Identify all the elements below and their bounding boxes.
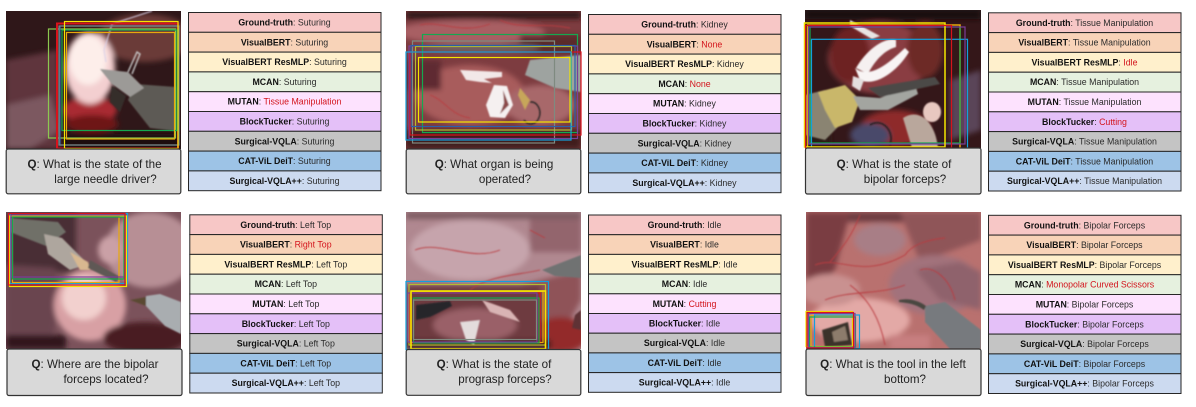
row: MUTAN: MUTAN: Kidney	[653, 99, 717, 109]
row: VisualBERT: VisualBERT: None	[647, 39, 722, 49]
question box 6: Q: What is the tool in the left	[820, 358, 967, 371]
row: MUTAN: MUTAN: Bipolar Forceps	[1036, 300, 1134, 310]
row: Surgical-VQLA++	[588, 173, 781, 193]
answer table 6	[988, 215, 1181, 394]
row: MCAN: MCAN: Left Top	[255, 279, 317, 289]
bounding boxes 4	[8, 214, 128, 286]
question box 6	[806, 349, 981, 396]
row: BlockTucker	[588, 314, 781, 333]
row: CAT-ViL DeiT: CAT-ViL DeiT: Kidney	[641, 158, 728, 168]
row: BlockTucker: BlockTucker: Bipolar Forceps	[1025, 319, 1144, 329]
row: CAT-ViL DeiT	[588, 353, 781, 373]
panel: tool in left bottom	[800, 212, 1181, 396]
surgical image 3 with bounding boxes	[805, 10, 981, 148]
row: CAT-ViL DeiT: CAT-ViL DeiT: Idle	[648, 358, 722, 368]
row: Ground-truth	[188, 12, 381, 32]
row: Surgical-VQLA	[988, 132, 1181, 151]
row: VisualBERT	[988, 33, 1181, 52]
row: Ground-truth: Ground-truth: Tissue Manipulation	[1016, 18, 1153, 28]
row: MCAN: MCAN: None	[658, 79, 711, 89]
answer table 3	[988, 13, 1181, 191]
row: VisualBERT: VisualBERT: Idle	[650, 240, 719, 250]
answer table 4	[190, 215, 382, 393]
question box 1: Q: What is the state of the	[27, 158, 162, 171]
row: CAT-ViL DeiT	[190, 353, 382, 373]
surgical image 4 with bounding boxes	[6, 212, 181, 349]
row: Surgical-VQLA: Surgical-VQLA: Suturing	[235, 136, 334, 146]
row: MCAN	[988, 72, 1181, 92]
row: CAT-ViL DeiT: CAT-ViL DeiT: Left Top	[240, 358, 331, 368]
row: VisualBERT ResMLP: VisualBERT ResMLP: Left Top	[224, 259, 347, 269]
answer table 5	[588, 215, 781, 392]
row: MCAN: MCAN: Idle	[662, 279, 707, 289]
row: Surgical-VQLA: Surgical-VQLA: Kidney	[638, 138, 732, 148]
question box 3: bipolar forceps?	[864, 173, 947, 186]
panel: bipolar forceps location	[6, 212, 382, 396]
answer table 2	[588, 14, 781, 193]
row: Surgical-VQLA++	[188, 171, 381, 191]
question box 2	[406, 149, 581, 194]
row: VisualBERT: VisualBERT: Right Top	[240, 240, 332, 250]
row: Surgical-VQLA	[588, 333, 781, 353]
row: CAT-ViL DeiT	[588, 153, 781, 173]
question box 1: large needle driver?	[54, 173, 157, 186]
row: MUTAN	[588, 294, 781, 314]
question box 1	[6, 149, 181, 194]
row: VisualBERT ResMLP: VisualBERT ResMLP: Idle	[632, 259, 738, 269]
question box 5: Q: What is the state of	[437, 358, 552, 371]
row: VisualBERT ResMLP	[190, 254, 382, 274]
row: Surgical-VQLA++: Surgical-VQLA++: Suturing	[229, 176, 340, 186]
question box 5: prograsp forceps?	[458, 373, 552, 386]
row: Surgical-VQLA	[588, 133, 781, 153]
row: CAT-ViL DeiT	[988, 354, 1181, 374]
row: BlockTucker: BlockTucker: Left Top	[242, 319, 330, 329]
row: CAT-ViL DeiT: CAT-ViL DeiT: Tissue Manipulation	[1016, 156, 1153, 166]
surgical image 5 with bounding boxes	[406, 212, 588, 353]
row: VisualBERT ResMLP	[188, 52, 381, 72]
question box 3: Q: What is the state of	[837, 158, 952, 171]
row: BlockTucker	[988, 112, 1181, 132]
row: VisualBERT ResMLP: VisualBERT ResMLP: Kidney	[625, 59, 744, 69]
row: VisualBERT ResMLP	[588, 54, 781, 74]
row: MCAN	[588, 274, 781, 294]
row: VisualBERT	[188, 32, 381, 52]
row: BlockTucker: BlockTucker: Suturing	[240, 116, 330, 126]
row: CAT-ViL DeiT	[188, 151, 381, 171]
answer table 1	[188, 12, 381, 191]
row: Ground-truth	[588, 14, 781, 34]
row: Surgical-VQLA	[988, 334, 1181, 354]
row: VisualBERT ResMLP	[988, 52, 1181, 72]
row: MUTAN: MUTAN: Left Top	[252, 299, 319, 309]
row: Surgical-VQLA++	[988, 374, 1181, 394]
row: VisualBERT: VisualBERT: Tissue Manipulation	[1018, 38, 1151, 48]
row: VisualBERT	[190, 235, 382, 254]
row: MUTAN: MUTAN: Tissue Manipulation	[1028, 97, 1141, 107]
row: MUTAN	[188, 92, 381, 112]
row: MCAN	[188, 72, 381, 92]
row: Surgical-VQLA++: Surgical-VQLA++: Left Top	[232, 378, 340, 388]
row: MUTAN	[988, 294, 1181, 314]
panel: bipolar forceps state	[804, 10, 1181, 194]
row: MCAN	[988, 275, 1181, 294]
row: Ground-truth: Ground-truth: Bipolar Forceps	[1024, 220, 1146, 230]
surgical image 6 with bounding boxes	[800, 212, 981, 349]
question box 4: forceps located?	[63, 373, 149, 386]
row: Surgical-VQLA	[190, 334, 382, 353]
question box 4	[7, 349, 182, 396]
row: CAT-ViL DeiT	[988, 151, 1181, 171]
question box 5	[406, 350, 581, 395]
row: Surgical-VQLA	[188, 131, 381, 151]
row: Ground-truth: Ground-truth: Idle	[648, 220, 721, 230]
row: Ground-truth	[988, 13, 1181, 33]
row: Ground-truth	[190, 215, 382, 235]
row: MCAN: MCAN: Monopolar Curved Scissors	[1015, 280, 1155, 290]
surgical image 1 with bounding boxes	[6, 11, 193, 149]
row: Ground-truth: Ground-truth: Left Top	[240, 220, 331, 230]
row: Ground-truth	[988, 215, 1181, 235]
row: CAT-ViL DeiT: CAT-ViL DeiT: Bipolar Forceps	[1024, 359, 1146, 369]
row: VisualBERT: VisualBERT: Suturing	[241, 37, 328, 47]
row: VisualBERT ResMLP	[988, 255, 1181, 275]
row: MUTAN: MUTAN: Tissue Manipulation	[228, 97, 341, 107]
row: VisualBERT	[588, 34, 781, 54]
row: BlockTucker: BlockTucker: Idle	[649, 318, 720, 328]
question box 2: Q: What organ is being	[435, 158, 553, 171]
row: Surgical-VQLA++: Surgical-VQLA++: Idle	[639, 378, 730, 388]
row: MCAN	[588, 74, 781, 94]
row: Surgical-VQLA++	[190, 373, 382, 393]
row: BlockTucker	[188, 112, 381, 131]
row: VisualBERT ResMLP: VisualBERT ResMLP: Bipolar Forceps	[1008, 260, 1162, 270]
row: VisualBERT ResMLP: VisualBERT ResMLP: Suturing	[222, 57, 347, 67]
surgical image 2 with bounding boxes	[395, 11, 581, 149]
row: MCAN: MCAN: Suturing	[252, 77, 317, 87]
row: Surgical-VQLA++	[588, 373, 781, 392]
row: Surgical-VQLA++	[988, 171, 1181, 191]
row: VisualBERT	[988, 235, 1181, 255]
question box 4: Q: Where are the bipolar	[32, 358, 159, 371]
question box 3	[806, 148, 981, 194]
row: MUTAN	[190, 294, 382, 314]
row: VisualBERT: VisualBERT: Bipolar Forceps	[1026, 240, 1143, 250]
row: Ground-truth	[588, 215, 781, 235]
bounding boxes 3	[804, 23, 968, 157]
row: BlockTucker	[988, 314, 1181, 334]
bounding boxes 5	[406, 282, 548, 350]
row: BlockTucker: BlockTucker: Cutting	[1042, 117, 1127, 127]
row: Surgical-VQLA++: Surgical-VQLA++: Bipolar Forceps	[1015, 379, 1155, 389]
bounding boxes 6	[806, 312, 860, 348]
row: BlockTucker	[588, 114, 781, 133]
row: MUTAN	[988, 92, 1181, 112]
bounding boxes 1	[48, 22, 179, 148]
row: MUTAN: MUTAN: Cutting	[653, 299, 717, 309]
row: Ground-truth: Ground-truth: Suturing	[238, 18, 331, 28]
row: VisualBERT	[588, 235, 781, 254]
row: VisualBERT ResMLP	[588, 254, 781, 274]
panel: organ being operated	[395, 11, 781, 194]
row: Surgical-VQLA++: Surgical-VQLA++: Tissue Manipulation	[1007, 176, 1162, 186]
row: Surgical-VQLA: Surgical-VQLA: Left Top	[237, 339, 335, 349]
row: MCAN	[190, 274, 382, 294]
row: MCAN: MCAN: Tissue Manipulation	[1030, 77, 1139, 87]
row: CAT-ViL DeiT: CAT-ViL DeiT: Suturing	[238, 156, 331, 166]
row: MUTAN	[588, 94, 781, 114]
question box 6: bottom?	[884, 373, 926, 386]
row: VisualBERT ResMLP: VisualBERT ResMLP: Idle	[1032, 57, 1138, 67]
row: BlockTucker: BlockTucker: Kidney	[643, 118, 727, 128]
bounding boxes 2	[406, 34, 581, 143]
panel: prograsp forceps state	[406, 212, 781, 395]
question box 2: operated?	[479, 173, 532, 186]
row: Surgical-VQLA: Surgical-VQLA: Bipolar Forceps	[1020, 339, 1149, 349]
row: Surgical-VQLA: Surgical-VQLA: Idle	[644, 338, 725, 348]
row: Surgical-VQLA++: Surgical-VQLA++: Kidney	[632, 178, 737, 188]
row: Ground-truth: Ground-truth: Kidney	[641, 20, 728, 30]
row: BlockTucker	[190, 314, 382, 334]
row: Surgical-VQLA: Surgical-VQLA: Tissue Manipulation	[1012, 137, 1157, 147]
panel: large needle driver suturing	[6, 11, 381, 194]
